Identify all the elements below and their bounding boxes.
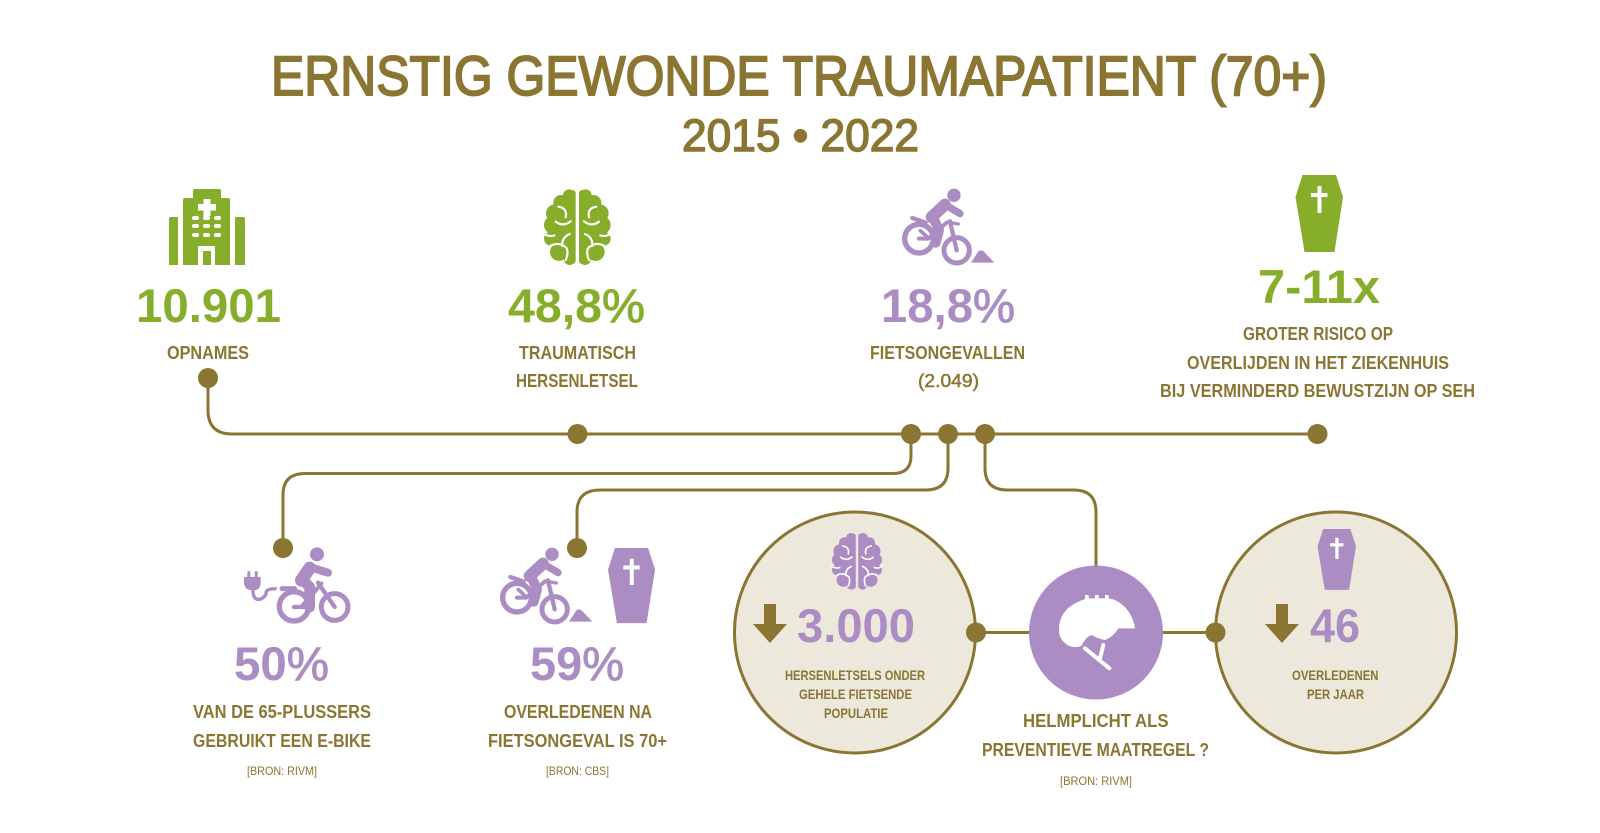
title: ERNSTIG GEWONDE TRAUMAPATIENT (70+) bbox=[271, 44, 1327, 107]
source: [BRON: CBS] bbox=[546, 764, 609, 778]
label: GROTER RISICO OP bbox=[1243, 324, 1393, 344]
stat: traumatisch hersenletsel bbox=[508, 189, 645, 391]
number: 59% bbox=[530, 637, 624, 690]
node bbox=[966, 622, 986, 642]
label bbox=[870, 343, 1025, 391]
label: FIETSONGEVALLEN bbox=[870, 343, 1025, 363]
source: [BRON: RIVM] bbox=[247, 764, 317, 778]
number: 18,8% bbox=[881, 279, 1015, 332]
number: 7-11x bbox=[1258, 260, 1380, 313]
connector: circles to helmet bbox=[976, 631, 1216, 634]
stat: groter risico bbox=[1160, 175, 1475, 401]
icon: coffin bbox=[1318, 529, 1356, 590]
arrow down bbox=[753, 604, 787, 643]
label: OPNAMES bbox=[167, 343, 249, 363]
icon: e-bike bbox=[244, 547, 348, 621]
stat: fietsongevallen bbox=[870, 189, 1025, 391]
number: 46 bbox=[1310, 599, 1360, 652]
icon: brain bbox=[831, 533, 883, 590]
icon: cyclist falling bbox=[503, 548, 592, 622]
stat: overledenen na fietsongeval bbox=[488, 548, 667, 778]
arrow down bbox=[1265, 604, 1299, 643]
circle background bbox=[734, 512, 976, 753]
label: TRAUMATISCH bbox=[519, 343, 636, 363]
number: 48,8% bbox=[508, 279, 645, 332]
icon: helmet bbox=[1029, 566, 1163, 700]
label bbox=[488, 702, 667, 751]
panel: helmplicht bbox=[982, 566, 1209, 788]
icon: brain bbox=[543, 189, 612, 265]
label bbox=[785, 667, 925, 721]
number: 3.000 bbox=[797, 599, 915, 652]
label bbox=[982, 711, 1209, 760]
label: BIJ VERMINDERD BEWUSTZIJN OP SEH bbox=[1160, 381, 1475, 401]
label: OVERLEDENEN bbox=[1292, 667, 1378, 683]
label: FIETSONGEVAL IS 70+ bbox=[488, 731, 667, 751]
subtitle: years: 2015 • 2022 bbox=[682, 110, 919, 161]
source: [BRON: RIVM] bbox=[1060, 774, 1132, 788]
icon: hospital bbox=[169, 189, 245, 265]
label: OVERLEDENEN NA bbox=[504, 702, 652, 722]
circle background bbox=[1216, 512, 1456, 753]
connector lines and nodes bbox=[198, 368, 1328, 566]
label bbox=[1160, 324, 1475, 401]
label: HERSENLETSELS ONDER bbox=[785, 667, 925, 683]
label: GEHELE FIETSENDE bbox=[799, 686, 912, 702]
icon: green coffin bbox=[1296, 175, 1343, 252]
panel: hersenletsels bbox=[734, 512, 986, 753]
stat: e-bike bbox=[193, 547, 371, 778]
label: OVERLIJDEN IN HET ZIEKENHUIS bbox=[1187, 353, 1449, 373]
label bbox=[193, 702, 371, 751]
icon: cyclist falling bbox=[905, 189, 994, 263]
label: POPULATIE bbox=[824, 705, 888, 721]
label: (2.049) bbox=[918, 371, 979, 391]
label: VAN DE 65-PLUSSERS bbox=[193, 702, 371, 722]
stat: opnames bbox=[136, 189, 281, 363]
panel: overledenen per jaar bbox=[1206, 512, 1456, 753]
label: HELMPLICHT ALS bbox=[1023, 711, 1168, 731]
label: GEBRUIKT EEN E-BIKE bbox=[193, 731, 371, 751]
node bbox=[1206, 622, 1226, 642]
number: 10.901 bbox=[136, 279, 281, 332]
label: PREVENTIEVE MAATREGEL ? bbox=[982, 740, 1209, 760]
label bbox=[516, 343, 638, 391]
number: 50% bbox=[234, 637, 329, 690]
label bbox=[1292, 667, 1378, 702]
icon: purple coffin bbox=[608, 548, 655, 623]
label: PER JAAR bbox=[1307, 686, 1364, 702]
label: HERSENLETSEL bbox=[516, 371, 638, 391]
